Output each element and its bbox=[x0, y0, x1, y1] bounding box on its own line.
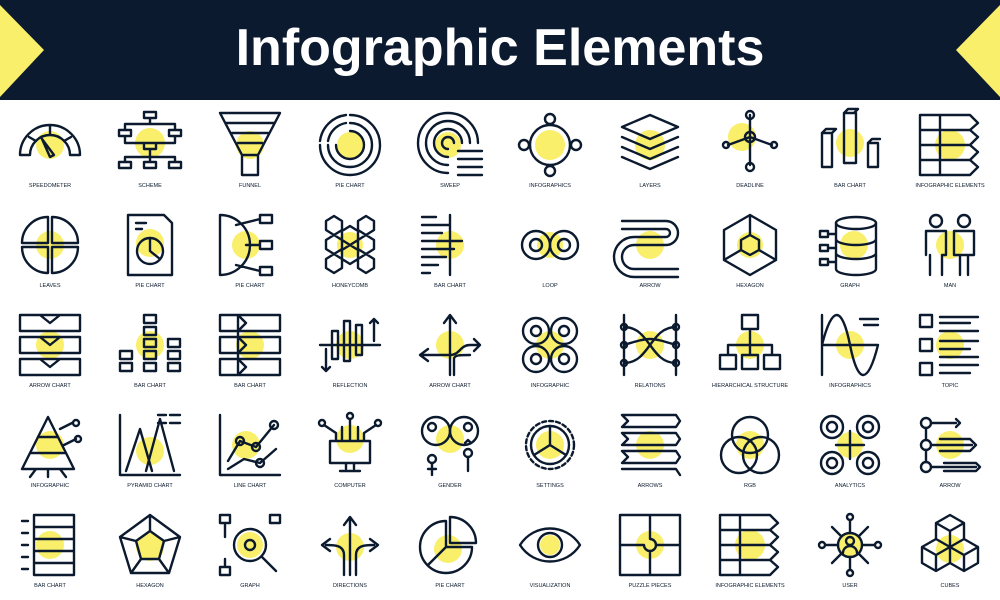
icon: funnel: FUNNEL bbox=[239, 183, 261, 189]
icon: infographic elements bbox=[715, 515, 785, 589]
icon: settings bbox=[526, 421, 574, 489]
icon: arrow list bbox=[921, 418, 980, 489]
icon: honeycomb bbox=[326, 216, 374, 289]
icon: infographic pyramid: INFOGRAPHIC bbox=[31, 483, 69, 489]
icon: topic: TOPIC bbox=[942, 383, 958, 389]
icon: scheme: SCHEME bbox=[138, 183, 162, 189]
icon: arrow chart bbox=[20, 315, 80, 389]
icon: user: USER bbox=[842, 583, 858, 589]
icon: puzzle pieces bbox=[620, 515, 680, 589]
icon: sweep bbox=[418, 113, 482, 189]
icon: settings: SETTINGS bbox=[536, 483, 564, 489]
icon: man bbox=[926, 215, 974, 289]
icon: graph: GRAPH bbox=[840, 283, 860, 289]
icon: pie chart split bbox=[220, 215, 272, 289]
icon: pie chart exploded: PIE CHART bbox=[435, 583, 465, 589]
icon: infographic pyramid bbox=[22, 417, 81, 489]
icon: visualization eye bbox=[520, 528, 580, 589]
icon: pie chart bbox=[320, 115, 380, 189]
icon: analytics bbox=[821, 416, 879, 489]
icon: hexagon pentagon bbox=[120, 515, 180, 589]
icon: reflection bbox=[320, 319, 380, 389]
icon: cubes bbox=[922, 515, 978, 589]
icon: computer bbox=[319, 413, 381, 489]
icon: infographics bbox=[519, 114, 581, 189]
left yellow arrow bbox=[0, 5, 44, 97]
icon: deadline: DEADLINE bbox=[736, 183, 764, 189]
icon: scheme bbox=[119, 112, 181, 189]
icon: hexagon pentagon: HEXAGON bbox=[136, 583, 164, 589]
icon: loop bbox=[522, 231, 578, 289]
icon: infographics wave: INFOGRAPHICS bbox=[829, 383, 871, 389]
icon: deadline bbox=[723, 111, 777, 189]
icon: rgb: RGB bbox=[744, 483, 756, 489]
icon: bar chart: BAR CHART bbox=[834, 183, 866, 189]
icon: computer: COMPUTER bbox=[334, 483, 366, 489]
icon: relations bbox=[621, 315, 679, 389]
icon: pie chart exploded bbox=[420, 517, 476, 589]
icon: graph magnifier bbox=[220, 515, 280, 589]
icon: hexagon bbox=[724, 215, 776, 289]
icon: infographics wave bbox=[822, 315, 878, 389]
icon: honeycomb: HONEYCOMB bbox=[332, 283, 368, 289]
icon: bar chart horizontal bbox=[422, 215, 466, 289]
icon: bar chart blocks bbox=[120, 315, 180, 389]
icon: hexagon: HEXAGON bbox=[736, 283, 764, 289]
icon: speedometer: SPEEDOMETER bbox=[29, 183, 71, 189]
header band bbox=[0, 0, 1000, 100]
icon: bar chart stack: BAR CHART bbox=[34, 583, 66, 589]
title: Infographic Elements bbox=[236, 19, 764, 77]
icon: arrow: ARROW bbox=[639, 283, 661, 289]
icon: infographic elements: INFOGRAPHIC ELEMENTS bbox=[915, 183, 985, 189]
icon: topic bbox=[920, 315, 978, 389]
icon: gender bbox=[422, 417, 478, 489]
icon: pyramid chart bbox=[120, 415, 180, 489]
icon: bar chart bbox=[822, 109, 880, 189]
icon: pyramid chart: PYRAMID CHART bbox=[127, 483, 173, 489]
icon: hierarchical structure: HIERARCHICAL STRUCTURE bbox=[712, 383, 788, 389]
icon: bar chart rows bbox=[220, 315, 280, 389]
icon: line chart: LINE CHART bbox=[234, 483, 267, 489]
icon: gender: GENDER bbox=[438, 483, 462, 489]
right yellow arrow bbox=[956, 5, 1000, 97]
icon: speedometer bbox=[20, 125, 80, 189]
icon: bar chart horizontal: BAR CHART bbox=[434, 283, 466, 289]
icon: directions bbox=[322, 517, 378, 589]
icon: rgb bbox=[721, 417, 779, 489]
icon: man: MAN bbox=[944, 283, 956, 289]
icon: arrow chart: ARROW CHART bbox=[29, 383, 71, 389]
icon: arrow chart directions: ARROW CHART bbox=[429, 383, 471, 389]
icon: bar chart blocks: BAR CHART bbox=[134, 383, 166, 389]
icon: graph magnifier: GRAPH bbox=[240, 583, 260, 589]
icon: puzzle pieces: PUZZLE PIECES bbox=[629, 583, 672, 589]
icon: sweep: SWEEP bbox=[440, 183, 460, 189]
icon: layers bbox=[622, 115, 678, 189]
icon: reflection: REFLECTION bbox=[333, 383, 367, 389]
icon: bar chart rows: BAR CHART bbox=[234, 383, 266, 389]
icon: leaves: LEAVES bbox=[40, 283, 61, 289]
icon: pie chart doc bbox=[128, 215, 172, 289]
icon: visualization eye: VISUALIZATION bbox=[530, 583, 570, 589]
icon: cubes: CUBES bbox=[941, 583, 960, 589]
icon: arrows: ARROWS bbox=[638, 483, 663, 489]
icon: infographics: INFOGRAPHICS bbox=[529, 183, 571, 189]
icon: infographic elements: INFOGRAPHIC ELEMENTS bbox=[715, 583, 785, 589]
icon: user bbox=[819, 514, 881, 589]
icon: pie chart: PIE CHART bbox=[335, 183, 365, 189]
icon: infographic elements bbox=[915, 115, 985, 189]
icon: pie chart split: PIE CHART bbox=[235, 283, 265, 289]
icon: layers: LAYERS bbox=[639, 183, 661, 189]
icon: analytics: ANALYTICS bbox=[835, 483, 865, 489]
icon: arrow bbox=[614, 221, 678, 289]
icon: arrows bbox=[622, 415, 680, 489]
icon: infographic: INFOGRAPHIC bbox=[531, 383, 569, 389]
icon: leaves bbox=[22, 217, 78, 289]
icon: relations: RELATIONS bbox=[635, 383, 666, 389]
icon: graph bbox=[820, 217, 876, 289]
icon: infographic bbox=[523, 318, 577, 389]
icon: bar chart stack bbox=[22, 515, 74, 589]
icon: hierarchical structure bbox=[712, 315, 788, 389]
icon: arrow list: ARROW bbox=[939, 483, 961, 489]
icon: pie chart doc: PIE CHART bbox=[135, 283, 165, 289]
icon: funnel bbox=[220, 113, 280, 189]
icon: loop: LOOP bbox=[542, 283, 558, 289]
icon: arrow chart directions bbox=[420, 315, 480, 389]
icon: line chart bbox=[220, 415, 280, 489]
icon: directions: DIRECTIONS bbox=[333, 583, 367, 589]
